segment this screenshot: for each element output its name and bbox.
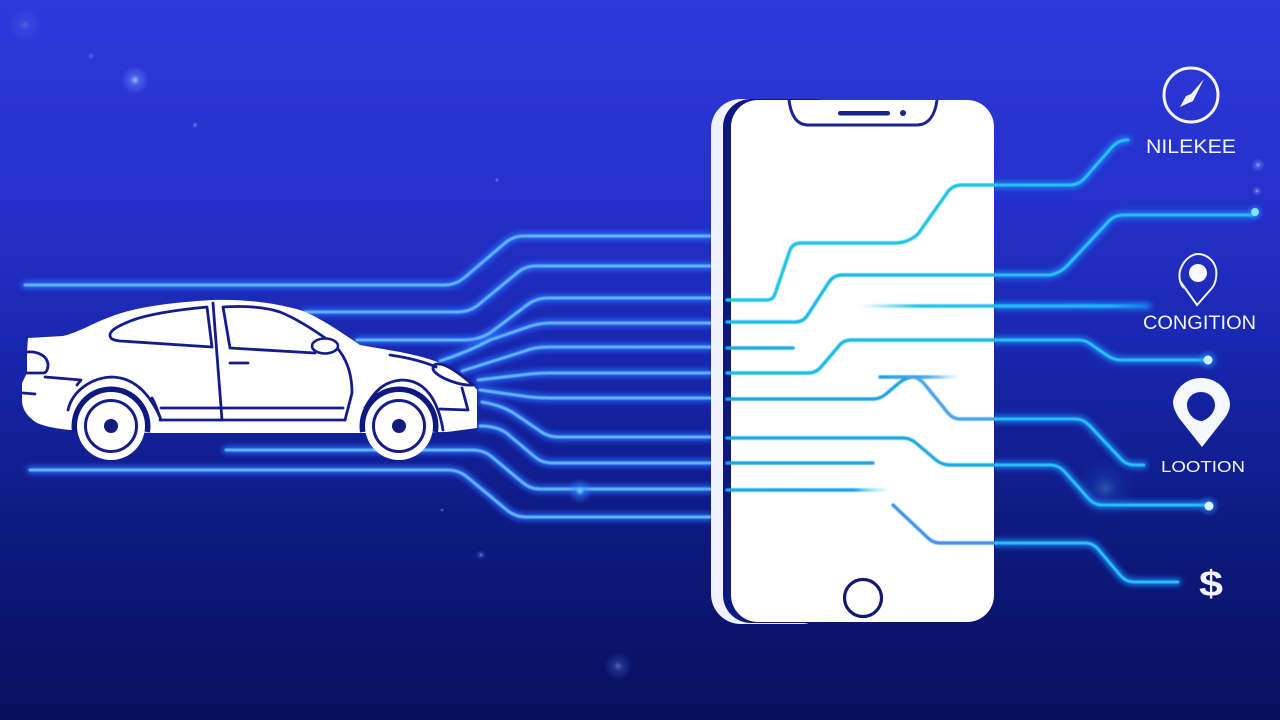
door pillars (213, 303, 222, 420)
car (22, 300, 477, 460)
car body (22, 300, 477, 433)
front arch (365, 380, 443, 430)
door edge (338, 349, 352, 420)
icon: compass (1164, 68, 1218, 122)
lines beyond the screen (985, 140, 1254, 582)
front window (223, 307, 335, 353)
phone screen (731, 100, 994, 622)
rear wheel (74, 389, 148, 460)
outer glow outside phone (985, 140, 1254, 582)
rear arch (68, 377, 160, 417)
data lines: car to phone (25, 236, 710, 517)
label: NILEKEE: NILEKEE (1146, 137, 1236, 158)
icon: outline pin (1179, 254, 1216, 305)
icon: location pin (1173, 378, 1230, 447)
mirror (312, 338, 338, 354)
phone back edge (711, 99, 831, 624)
icon: dollar sign: $ (1199, 563, 1223, 604)
front wheel (362, 389, 436, 460)
sill lines (160, 408, 345, 420)
lines on the screen (727, 185, 995, 543)
door handle (230, 362, 248, 364)
notch (789, 100, 937, 125)
hood line and head light (390, 355, 436, 367)
home button (844, 580, 882, 616)
phone side shadow (723, 99, 843, 623)
data lines: phone to outputs (727, 140, 1264, 582)
label: LOOTION: LOOTION (1161, 459, 1245, 476)
rear window (110, 307, 212, 347)
label: CONGITION: CONGITION (1143, 313, 1256, 334)
phone (711, 99, 994, 624)
car outlines (23, 303, 473, 430)
tail light (23, 352, 81, 394)
fading line (862, 304, 1152, 308)
